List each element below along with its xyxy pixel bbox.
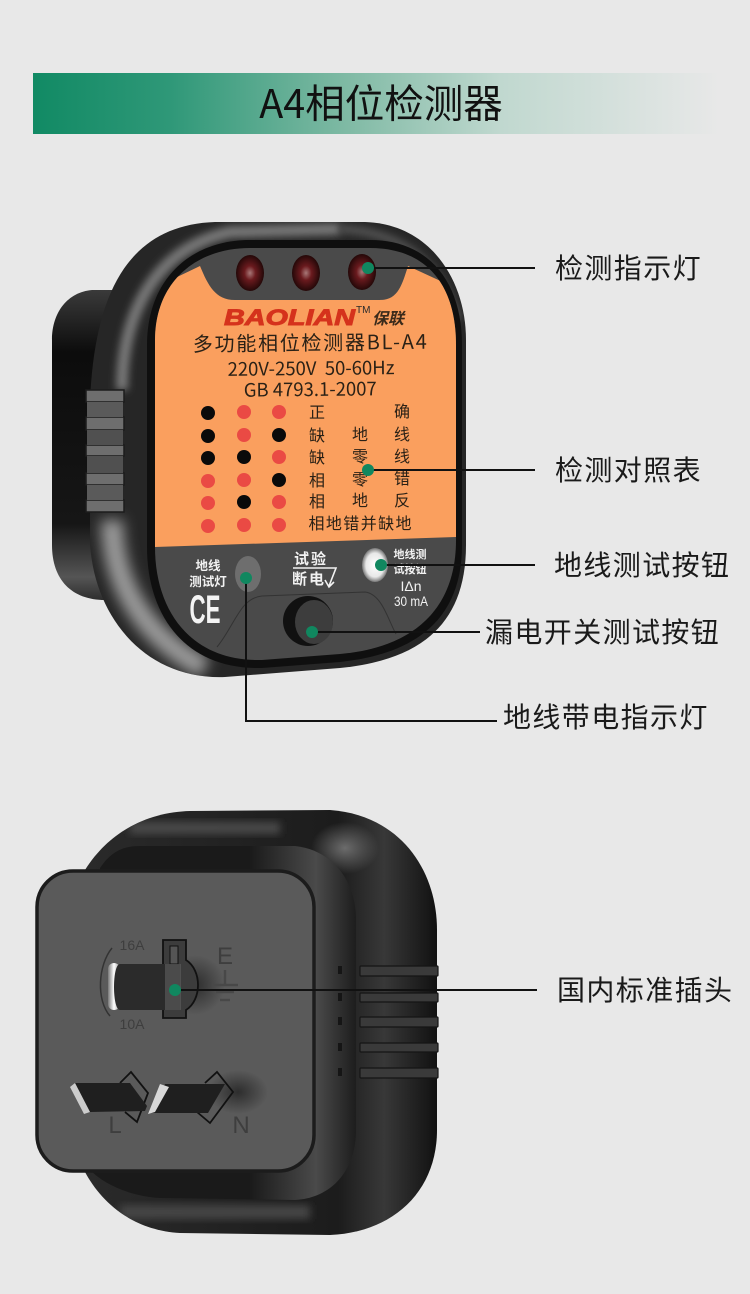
product name and specs: [193, 326, 427, 403]
title text: A4相位检测器: [259, 73, 503, 130]
callout: lookup table: [362, 449, 702, 489]
indicator lookup table text: 地: [352, 421, 368, 445]
indicator lookup table text: 错: [394, 465, 410, 489]
housing step ring: [90, 846, 356, 1200]
indicator lookup table text: 线: [394, 421, 410, 445]
product name and specs: GB 4793.1-2007: [244, 375, 377, 403]
live and neutral pins: [70, 1072, 233, 1123]
recess outline around trip button: [217, 592, 396, 647]
indicator lookup table text: [308, 398, 412, 534]
ground test button label: 试按钮: [394, 561, 426, 577]
current rating and pole marks: N: [232, 1112, 250, 1139]
indicator lookup table text: 相: [309, 467, 325, 491]
side grip ribs: [86, 390, 124, 512]
ground test button label: 地线测: [394, 546, 426, 562]
callout: ground test button: 地线测试按钮: [554, 544, 730, 584]
indicator lookup table text: 零: [352, 443, 368, 467]
rear housing: [52, 290, 130, 602]
brand logo: TM: [356, 305, 370, 316]
callout: ground live indicator: 地线带电指示灯: [503, 696, 709, 736]
tester face panel: [150, 240, 460, 670]
callout: ground test button: [375, 544, 730, 584]
indicator lookup table text: 相地错并缺地: [308, 510, 412, 534]
brand logo: 保联: [372, 305, 406, 329]
earth pin: [108, 940, 198, 1018]
outer housing: [85, 810, 437, 1235]
indicator lookup table text: 地: [352, 487, 368, 511]
indicator LEDs: [236, 254, 376, 291]
current rating and pole marks: E: [217, 943, 233, 970]
trip test button: [283, 596, 333, 646]
housing highlights: [120, 822, 379, 1219]
current rating and pole marks: 16A: [120, 937, 145, 953]
ground test lamp label: 地线: [195, 555, 221, 574]
rib ticks: [338, 966, 342, 1076]
indicator lookup table text: 正: [309, 399, 325, 423]
ground test button label: 30 mA: [394, 593, 429, 609]
orange panel: [150, 266, 460, 547]
indicator lookup table text: 缺: [309, 422, 325, 446]
indicator lookup table text: 反: [394, 487, 410, 511]
ground test button lens: [362, 548, 388, 582]
callout: leakage switch test button: 漏电开关测试按钮: [485, 611, 720, 651]
trip test label: 试验: [294, 548, 328, 569]
face surround: [147, 240, 462, 668]
callout: national standard plug: 国内标准插头: [557, 969, 733, 1009]
indicator lookup table text: 零: [352, 466, 368, 490]
brand logo: [224, 305, 406, 330]
indicator lookup table text: 线: [394, 443, 410, 467]
current rating and pole marks: [100, 937, 250, 1139]
product name and specs: 220V-250V 50-60Hz: [227, 354, 395, 382]
indicator lookup table dots: [201, 405, 286, 533]
trip test label: [292, 548, 336, 589]
callout: indicator lights: [362, 247, 702, 287]
grip ribs: [360, 966, 438, 1078]
indicator lookup table text: 相: [309, 488, 325, 512]
ground live lamp: [235, 556, 261, 592]
ground test lamp label: [189, 555, 227, 632]
brand logo: BAOLIAN: [224, 305, 356, 330]
callout: leakage switch test button: [306, 611, 720, 651]
product name and specs: 多功能相位检测器BL-A4: [193, 326, 427, 357]
product: plug rear view: [37, 810, 438, 1235]
ground test button label: IΔn: [400, 578, 422, 594]
callout: ground live indicator: [240, 572, 709, 736]
ground test lamp label: 测试灯: [189, 571, 227, 590]
housing highlights: [112, 229, 458, 668]
pin shadows: [165, 955, 225, 1015]
callout: lookup table: 检测对照表: [555, 449, 702, 489]
ground test lamp label: CE: [190, 588, 220, 632]
trip test label: 断电: [292, 568, 326, 589]
current rating and pole marks: 10A: [120, 1016, 145, 1032]
indicator lookup table text: 确: [394, 398, 410, 422]
plug face plate: [37, 871, 314, 1171]
indicator lookup table text: 缺: [309, 444, 325, 468]
callout: national standard plug: [169, 969, 733, 1009]
product: tester front view: [52, 222, 466, 677]
ground test button label: [394, 546, 429, 609]
title banner: [33, 73, 720, 134]
current rating and pole marks: L: [108, 1112, 122, 1139]
main housing: [90, 222, 466, 677]
callout: indicator lights: 检测指示灯: [555, 247, 702, 287]
